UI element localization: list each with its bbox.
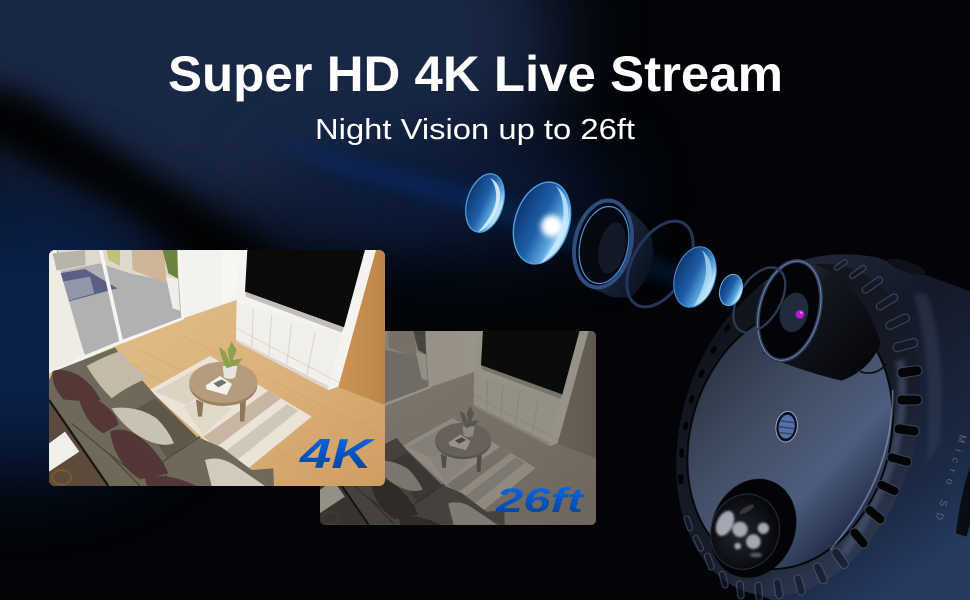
camera body [754,254,970,600]
micro sd slot [956,467,970,537]
rug [149,356,312,472]
panel: night vision photo 26ft [320,331,596,525]
title: Super HD 4K Live Stream [168,46,783,102]
label: 4K: 4K [299,430,376,477]
lens barrel ring [566,195,653,298]
cabinet [236,302,237,306]
face plate [686,323,894,570]
ring highlight [830,390,893,550]
lens 3 [667,242,723,312]
tv screen [245,250,365,327]
front ring [676,264,920,596]
throw blanket [205,458,265,486]
exploded lenses [459,169,746,318]
lens 2 [504,175,580,271]
vent slots left edge [678,323,732,484]
side table [49,400,108,486]
cushions: brown [52,370,101,401]
o-ring large [613,210,707,318]
patio through window [57,250,183,355]
back wall [49,250,247,373]
floor [49,250,385,486]
subtitle: Night Vision up to 26ft [315,114,635,146]
wood wall panel [337,250,385,405]
panel: daylight photo 4K [49,250,385,486]
sofa base [49,347,274,486]
floor planks [120,323,385,486]
vent slots light [683,259,919,600]
centre sensor [775,410,798,442]
lens 1 [459,169,511,237]
lens 4 [716,271,746,309]
coffee table [196,399,246,422]
night vision dome [710,478,797,578]
top button [888,258,926,274]
cushions: cream [87,351,147,398]
camera device [676,254,970,600]
sofa seams [72,408,200,486]
label: 26ft: 26ft [495,482,585,520]
plant [223,366,237,379]
planter [166,277,180,311]
door frames [101,250,122,343]
pool [59,269,117,302]
lens glare beam [465,190,720,295]
ring highlight band [843,360,902,553]
tv wall frame [236,250,376,390]
interior beyond door [132,250,167,283]
book [206,376,232,395]
lens barrel on camera [748,254,887,381]
o-ring on camera [723,259,796,341]
body highlight [913,293,942,463]
micro sd label: Micro SD [933,433,968,521]
vent slots [848,365,923,550]
